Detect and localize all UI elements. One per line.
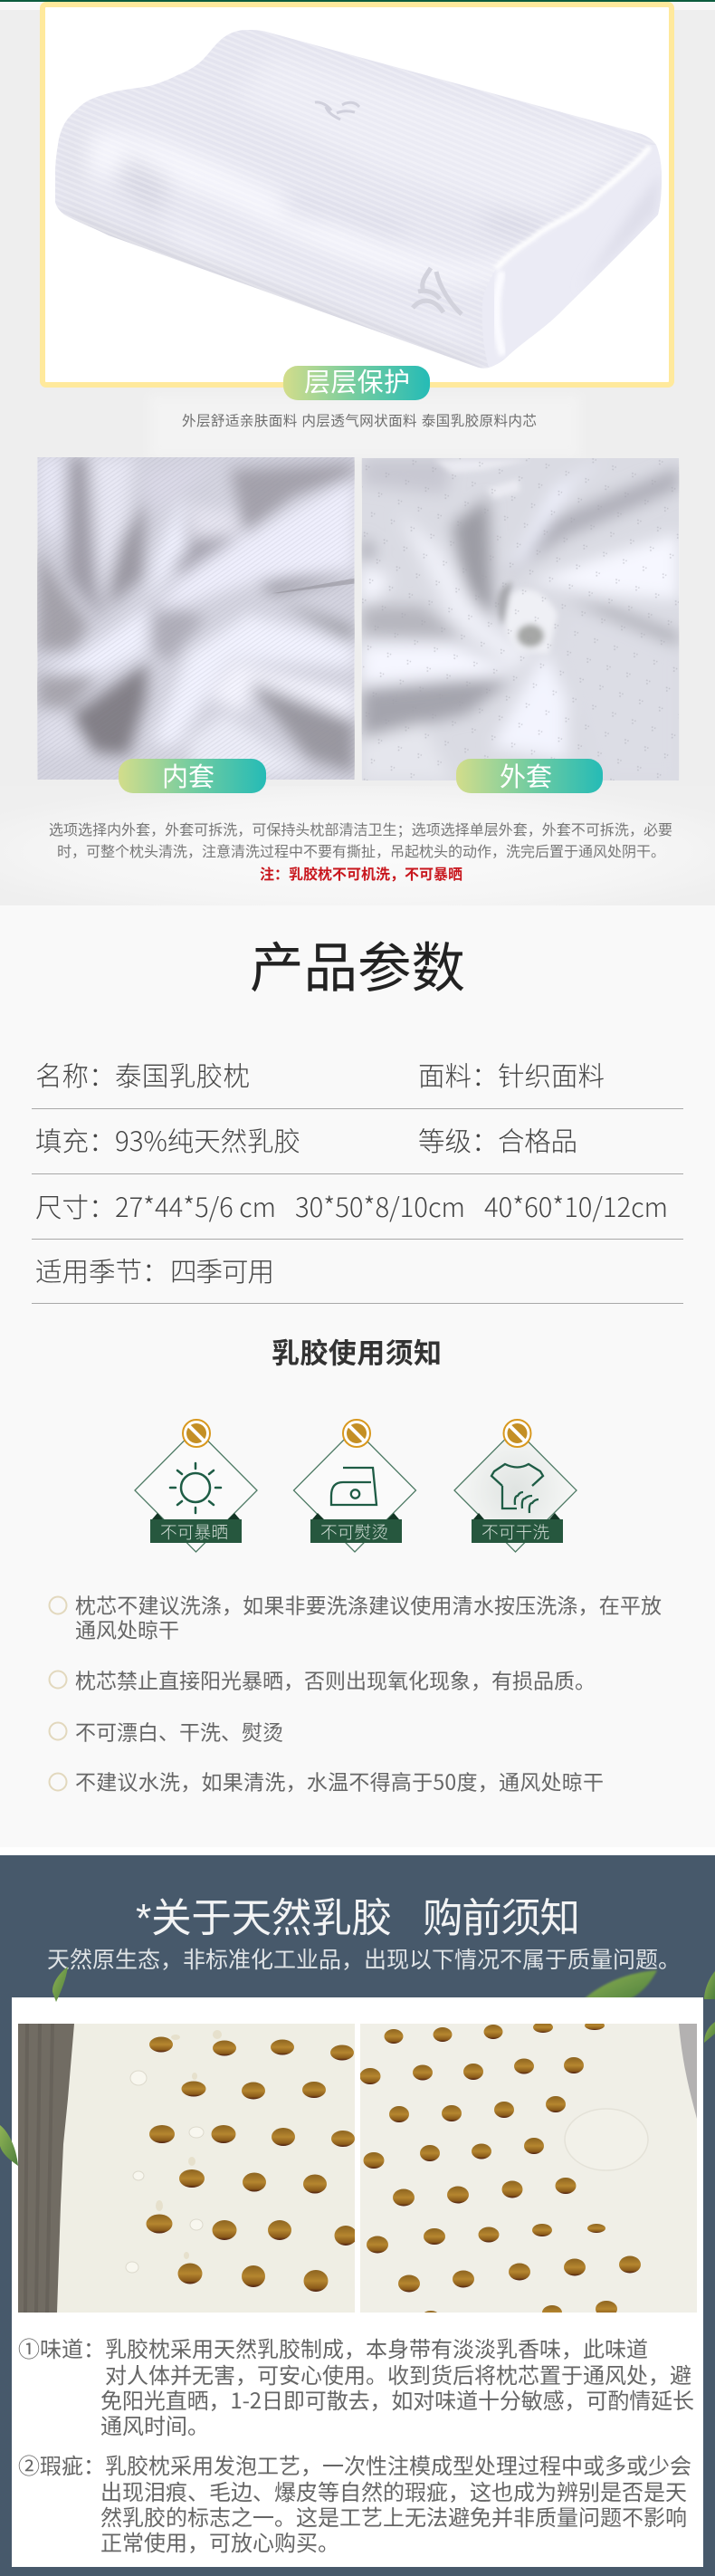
row: filling and grade: 等级： xyxy=(418,1121,499,1159)
pill: 外套: 外套 xyxy=(500,762,552,792)
note 1 xyxy=(49,1594,662,1642)
pillow photo xyxy=(50,27,665,380)
care description xyxy=(49,822,672,883)
explanation: smell: 通风时间。 xyxy=(100,2415,209,2439)
icon: no dry cleaning xyxy=(454,1420,577,1552)
row: sizes: 27*44*5/6 cm xyxy=(115,1187,276,1225)
explanation: flaws: ②瑕疵： xyxy=(18,2455,105,2479)
row: sizes: 尺寸： xyxy=(35,1187,116,1225)
note 2: 枕芯禁止直接阳光暴晒，否则出现氧化现象，有损品质。 xyxy=(75,1670,596,1693)
explanation: smell: 对人体并无害，可安心使用。收到货后将枕芯置于通风处，避 xyxy=(105,2364,691,2389)
row: filling and grade xyxy=(35,1121,577,1159)
care description: 注：乳胶枕不可机洗，不可暴晒 xyxy=(260,866,462,883)
heading: purchase notice: 购前须知 xyxy=(423,1896,580,1941)
pill: 内套 xyxy=(119,759,266,793)
note 3: 不可漂白、干洗、熨烫 xyxy=(75,1720,283,1744)
explanation: flaws: 出现泪痕、毛边、爆皮等自然的瑕疵，这也成为辨别是否是天 xyxy=(100,2481,687,2505)
leaf: small top left xyxy=(52,1967,68,2002)
subheading: 天然原生态，非标准化工业品，出现以下情况不属于质量问题。 xyxy=(47,1948,681,1973)
leaf: top right behind panel xyxy=(584,1970,657,2001)
note 1: 通风处晾干 xyxy=(75,1619,179,1642)
row: name and fabric: 泰国乳胶枕 xyxy=(115,1056,250,1094)
row: filling and grade: 93%纯天然乳胶 xyxy=(115,1121,300,1159)
explanation: flaws: 正常使用，可放心购买。 xyxy=(100,2532,339,2556)
explanation: smell: 乳胶枕采用天然乳胶制成，本身带有淡淡乳香味，此味道 xyxy=(105,2338,648,2362)
icon: no ironing: 不可熨烫 xyxy=(320,1523,388,1542)
row: season xyxy=(35,1251,274,1289)
photo: outer cover fabric xyxy=(362,458,679,780)
row: name and fabric: 针织面料 xyxy=(498,1056,605,1094)
pill: 外套 xyxy=(456,759,603,793)
photo: latex left xyxy=(18,2024,355,2313)
leaf: right edge xyxy=(704,2022,715,2043)
panel: product parameters xyxy=(0,905,715,1855)
row: name and fabric: 面料： xyxy=(418,1056,499,1094)
row: sizes: 40*60*10/12cm xyxy=(484,1187,668,1225)
row: filling and grade: 填充： xyxy=(35,1121,116,1159)
icon: no ironing xyxy=(293,1420,416,1552)
pill: 层层保护: 层层保护 xyxy=(304,368,410,397)
heading: usage notes: 乳胶使用须知 xyxy=(272,1338,442,1369)
explanation: smell: ①味道： xyxy=(18,2338,105,2362)
row: name and fabric xyxy=(35,1056,605,1094)
care description: 选项选择内外套，外套可拆洗，可保持头枕部清洁卫生；选项选择单层外套，外套不可拆洗，必要 xyxy=(49,822,672,838)
panel: layered protection xyxy=(0,0,715,905)
note 4: 不建议水洗，如果清洗，水温不得高于50度，通风处晾干 xyxy=(75,1766,604,1796)
photo: inner cover fabric xyxy=(37,457,355,780)
row: season: 适用季节： xyxy=(35,1251,169,1289)
explanation: flaws: 然乳胶的标志之一。这是工艺上无法避免并非质量问题不影响 xyxy=(100,2506,687,2531)
white content card xyxy=(12,1997,703,2567)
pill: 层层保护 xyxy=(283,366,430,400)
leaf: far right edge xyxy=(704,1971,715,1999)
caption: fabric layers: 外层舒适亲肤面料 内层透气网状面料 泰国乳胶原料内芯 xyxy=(182,413,537,429)
row: sizes: 30*50*8/10cm xyxy=(295,1187,465,1225)
panel: natural latex purchase notice xyxy=(0,1855,715,2576)
explanation: smell xyxy=(18,2338,694,2439)
row: sizes xyxy=(35,1187,668,1225)
care description: 时，可整个枕头清洗，注意清洗过程中不要有撕扯，吊起枕头的动作，洗完后置于通风处阴干。 xyxy=(57,843,665,860)
heading: purchase notice: *关于天然乳胶 xyxy=(136,1896,392,1941)
photo: latex right xyxy=(360,2024,697,2313)
embroidered logo corner xyxy=(413,268,462,314)
pill: 内套: 内套 xyxy=(162,762,214,792)
explanation: flaws xyxy=(18,2455,691,2556)
row: filling and grade: 合格品 xyxy=(498,1121,577,1159)
embroidered logo xyxy=(315,102,359,120)
heading: purchase notice xyxy=(136,1896,580,1941)
heading: 产品参数: 产品参数 xyxy=(250,938,465,999)
icon: no dry cleaning: 不可干洗 xyxy=(481,1523,549,1542)
explanation: flaws: 乳胶枕采用发泡工艺，一次性注模成型处理过程中或多或少会 xyxy=(105,2455,691,2479)
product frame xyxy=(43,5,672,385)
row: season: 四季可用 xyxy=(170,1251,274,1289)
notes list xyxy=(49,1594,662,1796)
row: name and fabric: 名称： xyxy=(35,1056,116,1094)
leaf: left edge xyxy=(0,2125,18,2166)
explanation: smell: 免阳光直晒，1-2日即可散去，如对味道十分敏感，可酌情延长 xyxy=(100,2383,694,2415)
icon: no sun exposure xyxy=(135,1420,257,1552)
note 1: 枕芯不建议洗涤，如果非要洗涤建议使用清水按压洗涤，在平放 xyxy=(75,1594,662,1617)
pillow end face xyxy=(487,232,554,368)
icon: no sun exposure: 不可暴晒 xyxy=(160,1523,228,1542)
